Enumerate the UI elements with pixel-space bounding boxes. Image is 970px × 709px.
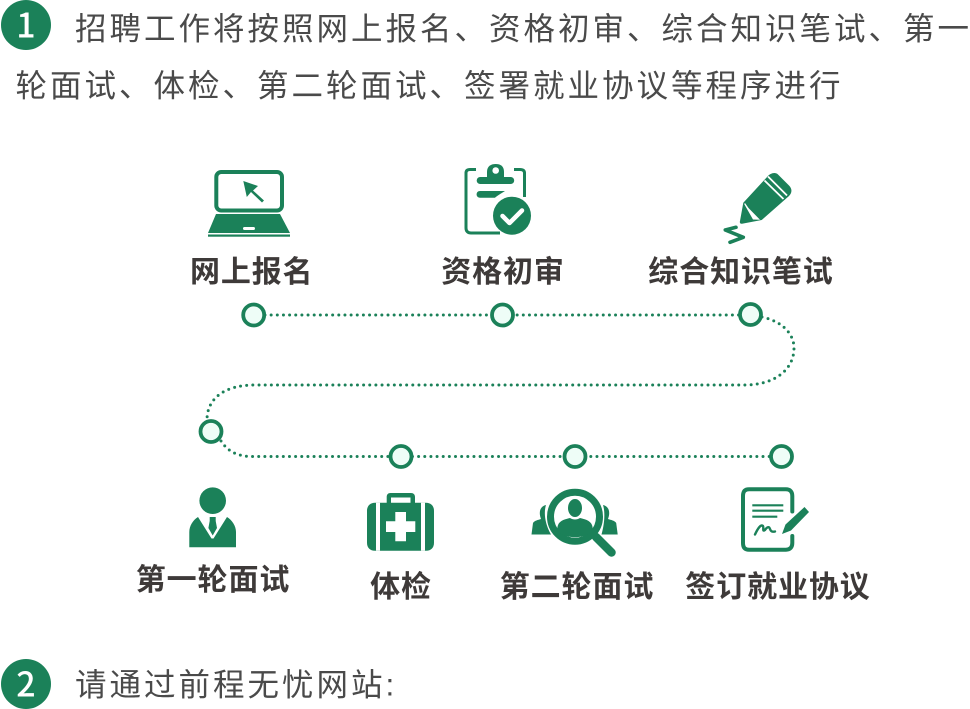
label: online registration: 网上报名: [190, 256, 314, 289]
icon: medical kit: [367, 493, 434, 551]
text block: recruitment procedure intro: 招聘工作将按照网上报名、资格初审、综合知识笔试、第一: [75, 10, 970, 46]
icon: pencil: [725, 173, 791, 242]
icon: magnifier over people: [532, 492, 618, 552]
label: qualification review: 资格初审: [441, 256, 565, 289]
dotted route connector: [207, 315, 794, 456]
label: first interview: 第一轮面试: [136, 564, 290, 597]
text block: apply via website: 请通过前程无忧网站:: [75, 666, 397, 702]
icon: laptop: [208, 172, 290, 237]
label: written test: 综合知识笔试: [648, 256, 834, 289]
label: second interview: 第二轮面试: [500, 571, 654, 604]
badge: step 1: [1, 0, 51, 50]
text block: recruitment procedure intro: [16, 10, 970, 104]
badge: step 2: [1, 658, 51, 709]
icon: clipboard with check: [466, 164, 531, 235]
label: medical examination: 体检: [370, 571, 432, 604]
text block: recruitment procedure intro: 轮面试、体检、第二轮面试、签署就业协议等程序进行: [16, 68, 844, 104]
icon: signed agreement: [743, 489, 809, 550]
route nodes: [200, 304, 792, 467]
badge: step 2: 2: [16, 658, 36, 706]
label: sign employment agreement: 签订就业协议: [685, 571, 871, 604]
icon: person in suit: [189, 487, 236, 547]
